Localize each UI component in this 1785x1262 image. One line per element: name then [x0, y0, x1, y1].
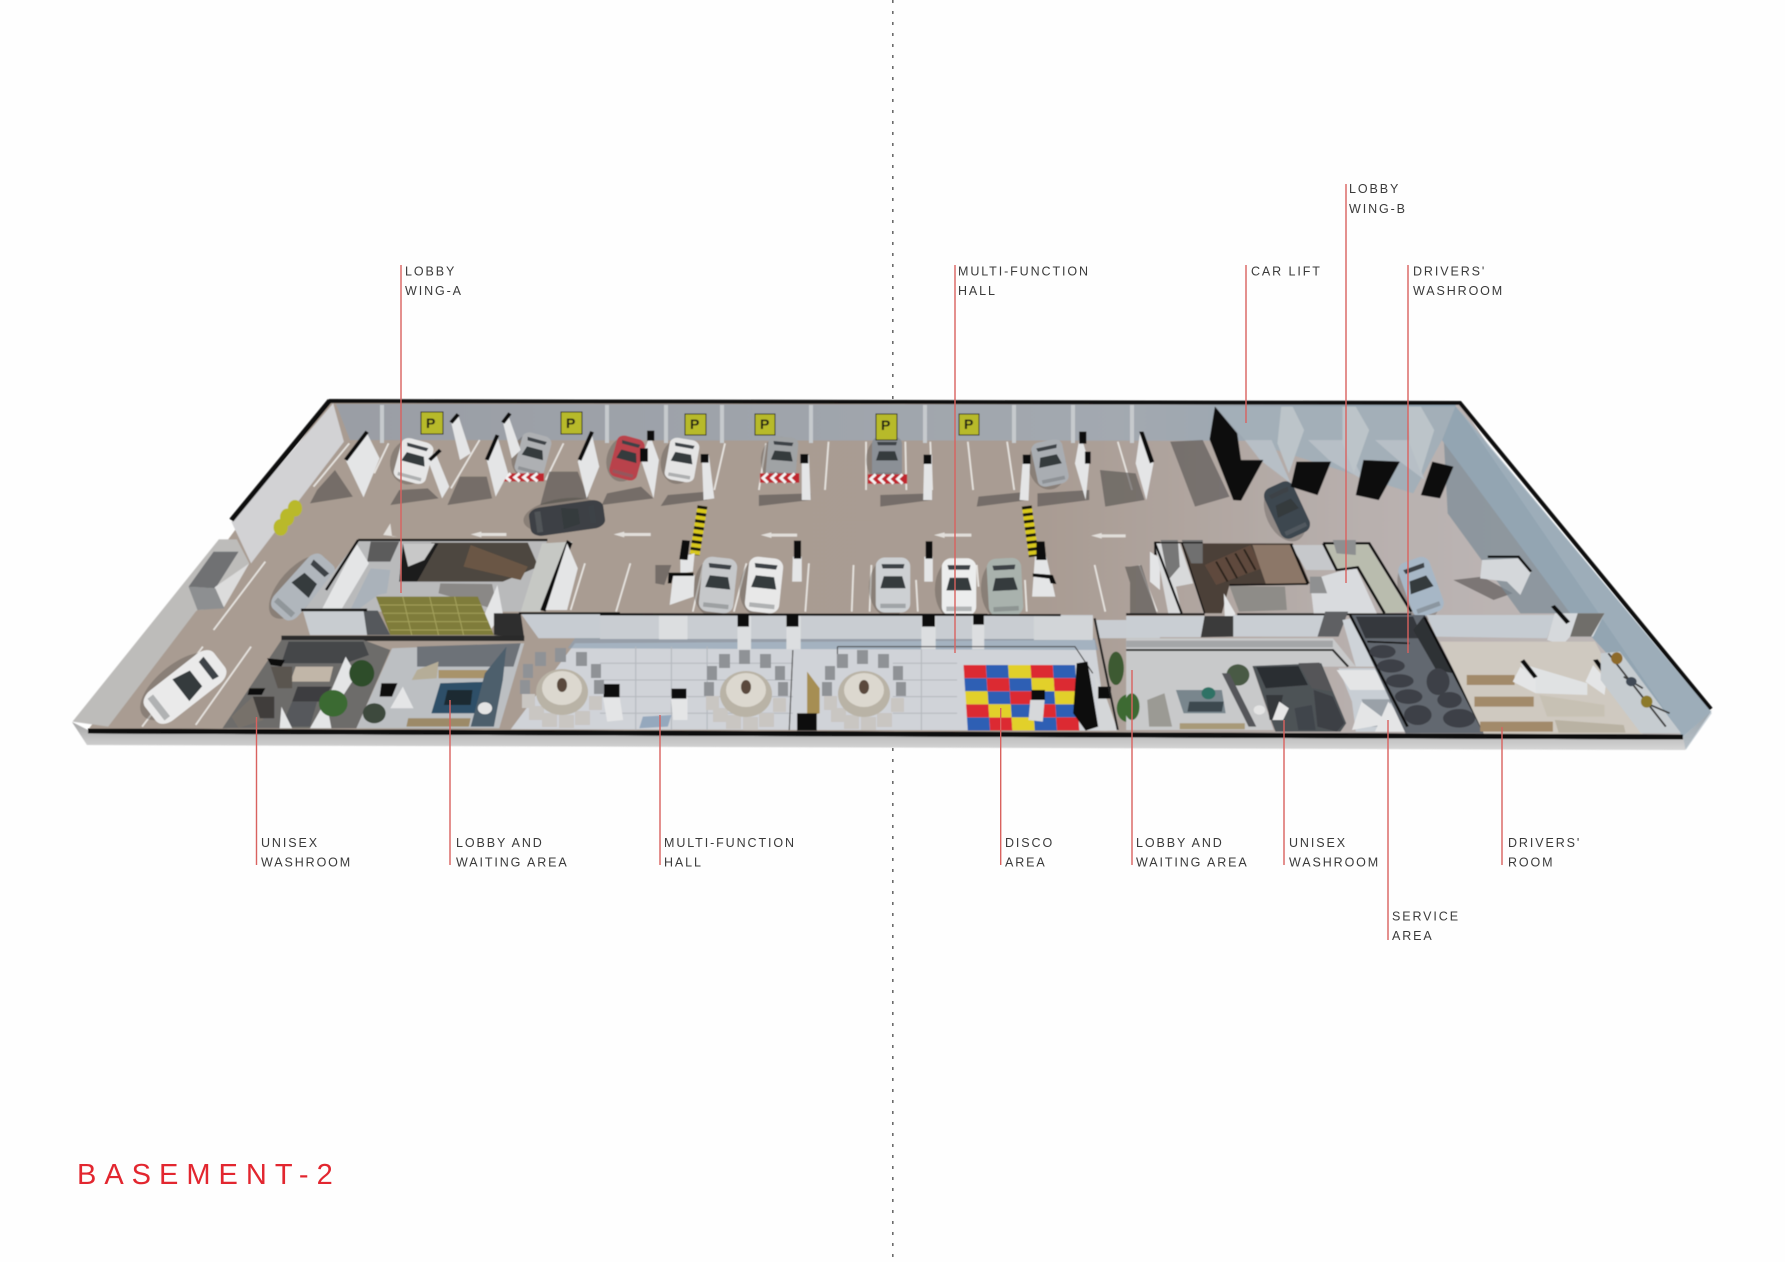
label: Lobby Wing-B: WING-B	[1349, 202, 1407, 216]
slab side edge	[72, 710, 1712, 750]
label: Lobby and Waiting Area right: LOBBY AND	[1136, 836, 1224, 850]
label: Multi-function Hall bottom: HALL	[664, 856, 703, 870]
lower right lobby and washroom	[1124, 615, 1681, 734]
hall boundary wall	[600, 614, 1093, 649]
label: Unisex Washroom left	[256, 717, 352, 870]
label: Lobby Wing-A: WING-A	[405, 284, 463, 298]
parking floor	[88, 401, 1683, 737]
core footprint	[303, 540, 547, 612]
lobby and waiting B	[1126, 638, 1356, 730]
stair well	[417, 543, 539, 582]
partition screen	[807, 672, 820, 717]
yellow parking signs: P	[690, 416, 699, 432]
lobby and waiting	[356, 643, 524, 728]
parking bay stripes centre	[616, 442, 1157, 612]
label: Multi-function Hall top	[955, 264, 1090, 653]
right wall floor shadow	[1444, 440, 1574, 613]
label: Unisex Washroom right	[1284, 720, 1380, 870]
basement floor plan	[72, 401, 1712, 750]
label: Lobby Wing-B	[1346, 182, 1407, 583]
label: Car Lift: CAR LIFT	[1251, 264, 1322, 278]
centre fold dotted line	[892, 0, 894, 1262]
corridor wall	[303, 611, 367, 635]
right perimeter wall	[1442, 406, 1712, 750]
label: Multi-function Hall top: HALL	[958, 284, 997, 298]
label: Unisex Washroom left: UNISEX	[261, 836, 319, 850]
lobby wing B core	[1126, 540, 1605, 645]
floor shadows	[310, 440, 1513, 613]
DJ booth and column	[1029, 618, 1160, 731]
outer black rim	[88, 401, 1711, 737]
floor direction arrows	[383, 523, 1126, 539]
lower left washroom and lobby rooms	[222, 640, 524, 728]
label: Unisex Washroom left: WASHROOM	[261, 856, 352, 870]
label: Drivers' Washroom	[1408, 264, 1504, 653]
label: Disco Area: AREA	[1005, 856, 1047, 870]
label: Drivers' Room: DRIVERS'	[1508, 836, 1581, 850]
disco floor	[964, 665, 1079, 730]
car lift bays	[1210, 407, 1455, 501]
label: Disco Area	[1001, 708, 1054, 870]
yellow parking signs: P	[964, 416, 973, 432]
back wall column marks	[380, 405, 1134, 443]
label: Drivers' Room	[1502, 727, 1581, 870]
green feature wall	[376, 597, 494, 635]
yellow parking signs: P	[881, 417, 890, 433]
drivers washroom	[1350, 615, 1484, 733]
yellow parking signs	[421, 412, 979, 440]
label: Drivers' Washroom: WASHROOM	[1413, 284, 1504, 298]
yellow parking signs: P	[426, 415, 435, 431]
banquet tables	[520, 648, 906, 730]
label: Service Area: SERVICE	[1392, 910, 1460, 924]
label: Lobby and Waiting Area left	[450, 700, 569, 870]
label: Lobby and Waiting Area left: LOBBY AND	[456, 836, 544, 850]
label: Drivers' Room: ROOM	[1508, 856, 1554, 870]
label: Multi-function Hall top: MULTI-FUNCTION	[958, 264, 1090, 278]
label: Multi-function Hall bottom	[660, 715, 796, 870]
lobby wing A core	[281, 540, 620, 638]
hall columns	[603, 684, 687, 722]
label: Unisex Washroom right: WASHROOM	[1289, 856, 1380, 870]
unisex washroom	[222, 640, 390, 728]
label: Lobby and Waiting Area right: WAITING AREA	[1136, 856, 1249, 870]
parking bay stripes left	[142, 440, 585, 727]
washroom B	[1252, 663, 1346, 732]
yellow parking signs: P	[760, 416, 769, 432]
label: Unisex Washroom right: UNISEX	[1289, 836, 1347, 850]
label: Service Area: AREA	[1392, 929, 1434, 943]
chevron barriers	[503, 473, 907, 484]
label: Disco Area: DISCO	[1005, 836, 1054, 850]
title: Basement-2: BASEMENT-2	[77, 1159, 341, 1191]
drivers room	[1440, 642, 1643, 734]
timber stair	[464, 545, 528, 580]
label: Multi-function Hall bottom: MULTI-FUNCTION	[664, 836, 796, 850]
label: Lobby Wing-A: LOBBY	[405, 264, 456, 278]
label: Drivers' Washroom: DRIVERS'	[1413, 264, 1486, 278]
service area	[1339, 668, 1406, 732]
label: Service Area	[1388, 720, 1460, 943]
yellow parking signs: P	[566, 415, 575, 431]
label: Lobby Wing-B: LOBBY	[1349, 182, 1400, 196]
parking partition walls	[346, 413, 1160, 605]
back wall	[336, 404, 1456, 441]
front black rim redraw	[88, 731, 1683, 737]
label: Lobby and Waiting Area left: WAITING AREA	[456, 856, 569, 870]
label: Lobby and Waiting Area right	[1132, 670, 1249, 870]
left perimeter walls	[72, 401, 344, 727]
label: Lobby Wing-A	[401, 264, 463, 593]
multi-function hall floor	[511, 614, 1107, 731]
yellow safety figures	[274, 500, 302, 536]
yellow speed breakers	[695, 506, 1034, 557]
parked cars	[129, 429, 1448, 733]
